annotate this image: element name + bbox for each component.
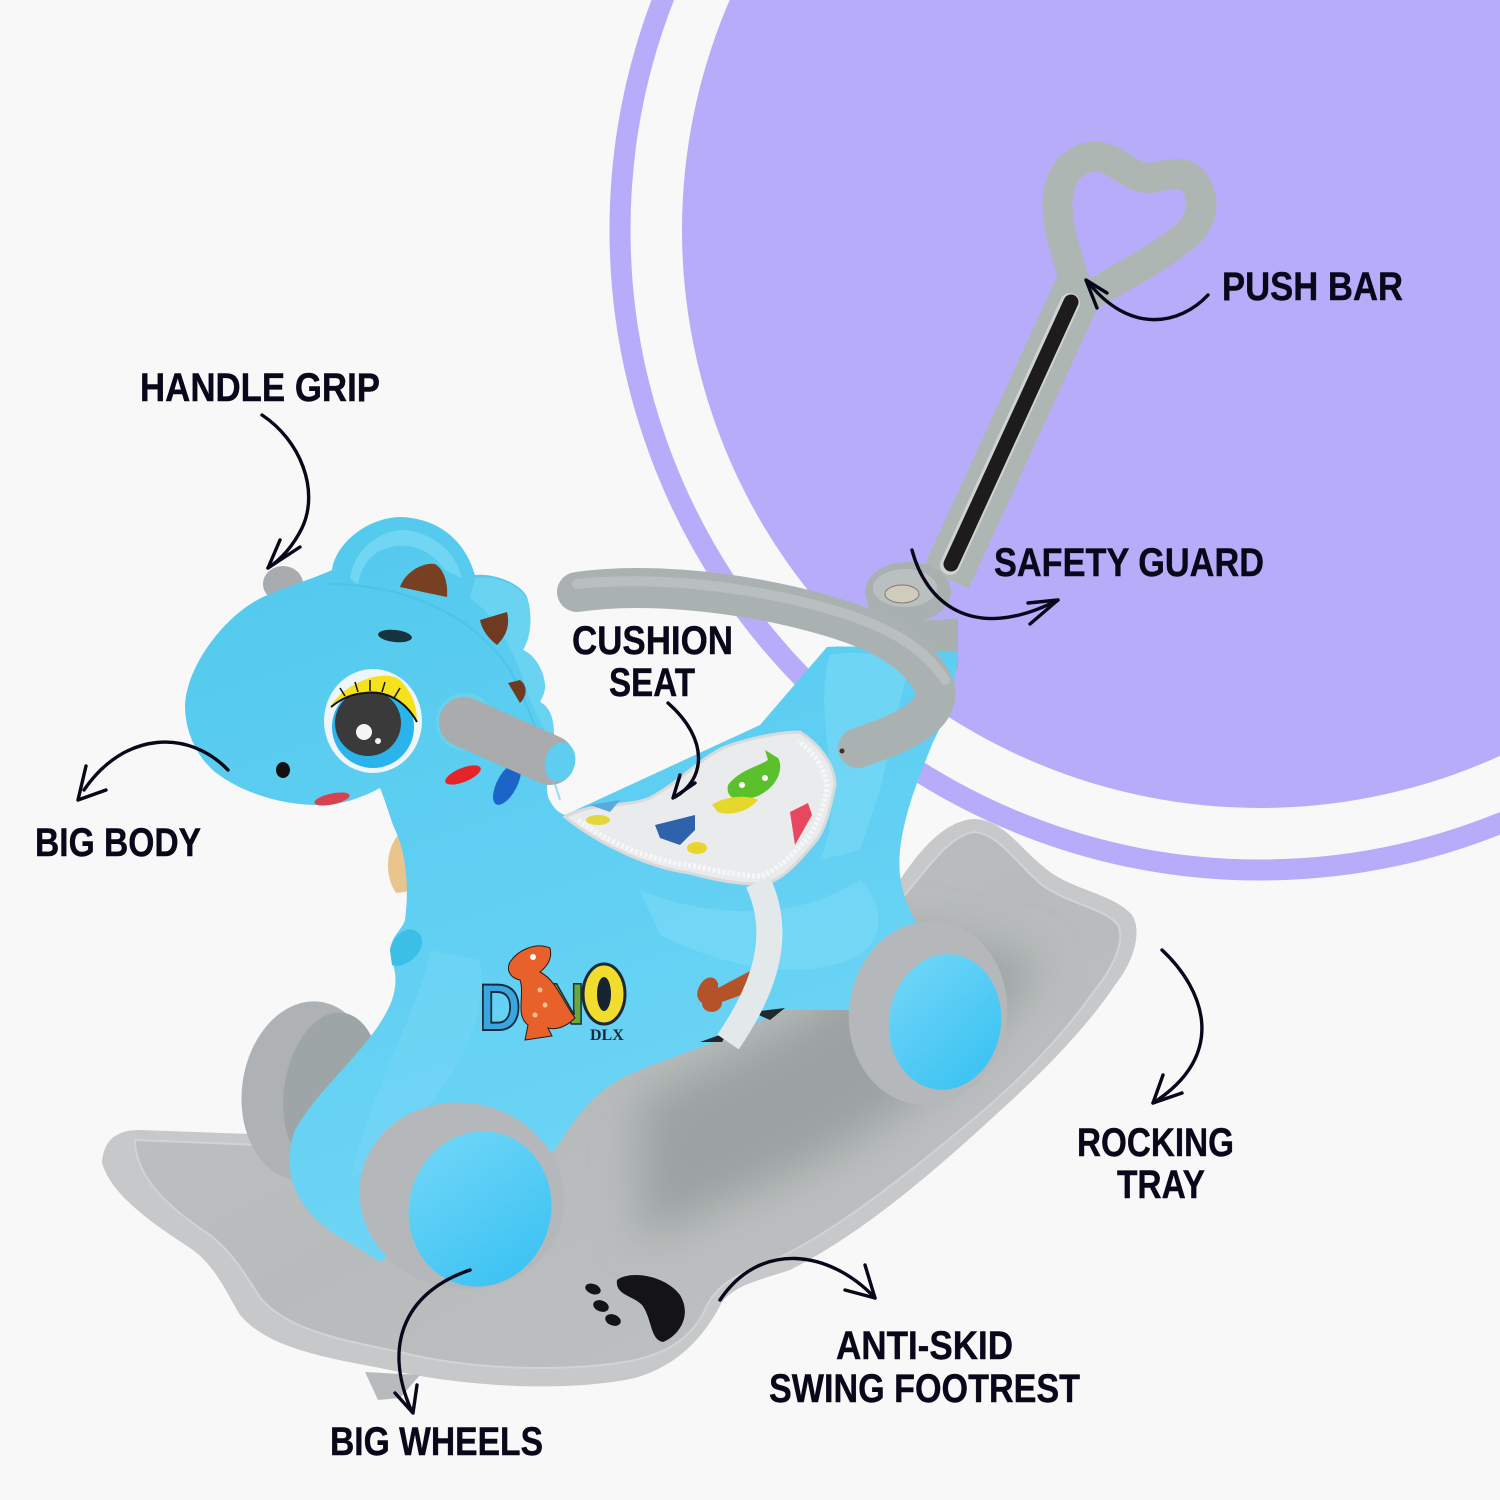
arrow: big wheels <box>395 1270 470 1413</box>
label: handle grip: HANDLE GRIP <box>140 366 380 410</box>
label: cushion seat: SEAT <box>609 661 695 705</box>
arrow: push bar <box>1086 280 1208 320</box>
sticker: DINO DLX <box>479 946 625 1044</box>
label: rocking tray <box>1077 1121 1234 1207</box>
label: rocking tray: TRAY <box>1117 1163 1205 1207</box>
head slot <box>377 628 413 644</box>
cushion seat <box>565 732 835 1042</box>
mouth <box>313 790 351 808</box>
chest knob <box>390 929 422 966</box>
swivel base <box>865 562 951 622</box>
arrow: cushion seat <box>668 703 699 798</box>
label: push bar: PUSH BAR <box>1222 265 1403 309</box>
label: cushion seat <box>572 619 733 705</box>
handle grip near side <box>436 693 580 785</box>
arrow: handle grip <box>262 415 309 568</box>
label: rocking tray: ROCKING <box>1077 1121 1234 1165</box>
label: big body: BIG BODY <box>35 821 201 865</box>
arrow: safety guard <box>912 550 1058 624</box>
sticker: DINO DLX: IN <box>527 972 585 1037</box>
far handle grip <box>263 566 303 602</box>
rocking tray <box>102 819 1137 1400</box>
seat prints <box>586 750 812 854</box>
arrow: anti-skid footrest <box>720 1258 875 1300</box>
label: anti-skid swing footrest <box>769 1324 1080 1411</box>
icon: footprint on tray <box>584 1275 685 1342</box>
heart handle <box>1057 157 1201 293</box>
red and blue lights <box>443 761 483 789</box>
sticker: DINO DLX: D <box>479 970 521 1044</box>
nostril <box>276 762 290 778</box>
seat strap <box>728 882 769 1042</box>
far left wheel <box>230 993 391 1189</box>
dark gap under body <box>700 1008 785 1042</box>
purple circle backdrop <box>620 0 1500 870</box>
seat stitched edge <box>578 741 827 876</box>
rear wheel <box>837 911 1019 1115</box>
eye <box>324 669 422 773</box>
label: big wheels: BIG WHEELS <box>330 1420 543 1464</box>
arrow: big body <box>78 742 228 800</box>
dinosaur body <box>185 517 958 1262</box>
sticker: bone <box>697 970 755 1012</box>
crest highlight <box>350 530 462 585</box>
label: cushion seat: CUSHION <box>572 619 733 663</box>
front wheel <box>342 1084 582 1308</box>
beige tab behind neck <box>388 835 420 893</box>
mane highlight <box>470 578 554 747</box>
label: anti-skid swing footrest: SWING FOOTREST <box>769 1367 1080 1411</box>
arrow: rocking tray <box>1153 950 1202 1103</box>
ears <box>400 564 447 597</box>
label: anti-skid swing footrest: ANTI-SKID <box>836 1324 1013 1368</box>
push bar <box>865 157 1201 670</box>
label: safety guard: SAFETY GUARD <box>994 541 1264 585</box>
bar shaft <box>946 282 1082 578</box>
sticker: DINO DLX: DLX <box>590 1027 624 1044</box>
safety guard <box>577 581 945 754</box>
